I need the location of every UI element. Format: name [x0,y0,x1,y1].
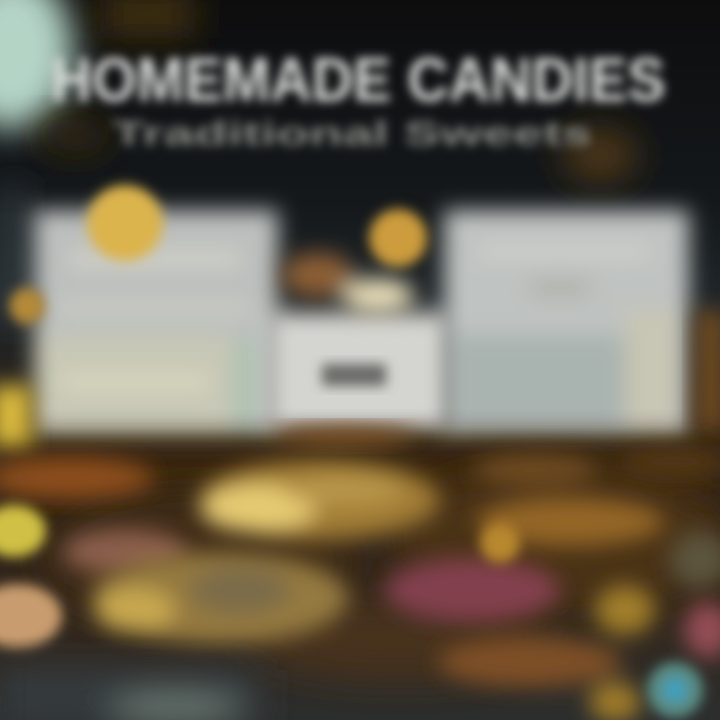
candy: peach disc [0,584,62,648]
tray: warm underlay beneath dishes [40,470,720,680]
candy: front brown bar and gold piece [438,585,720,720]
candy: large golden dish [200,460,440,540]
candy: left yellow disc [0,505,46,557]
candy: rear orange dish [0,457,154,499]
candy: brown and cream pieces at centre [282,253,414,314]
candy: pink disc [63,529,187,575]
candy: right brown stack [473,448,720,588]
panel: centre card [268,312,450,432]
candy: gold drop above raspberry disc [480,523,520,563]
panel: left card [34,210,278,438]
candy: patterned golden disc [92,552,348,644]
icon: small left coin [9,288,45,324]
subtitle: Traditional Sweets [112,115,592,153]
tray: rear dark band [0,445,720,505]
background glow: mint blob and dark gold top [0,0,638,320]
candy: right edge pieces [695,310,720,435]
foreground: slate table [0,670,260,720]
icon: large gold coin [87,185,163,261]
centre card dark label [322,364,386,386]
icon: centre gold coin [369,209,427,267]
candy: rear centre strip [275,426,415,446]
panel: right card [444,210,689,438]
candy: raspberry disc [384,558,560,622]
candy: left yellow block [0,385,32,447]
icon: blue badge [647,662,703,718]
title: HOMEMADE CANDIES [50,46,666,115]
